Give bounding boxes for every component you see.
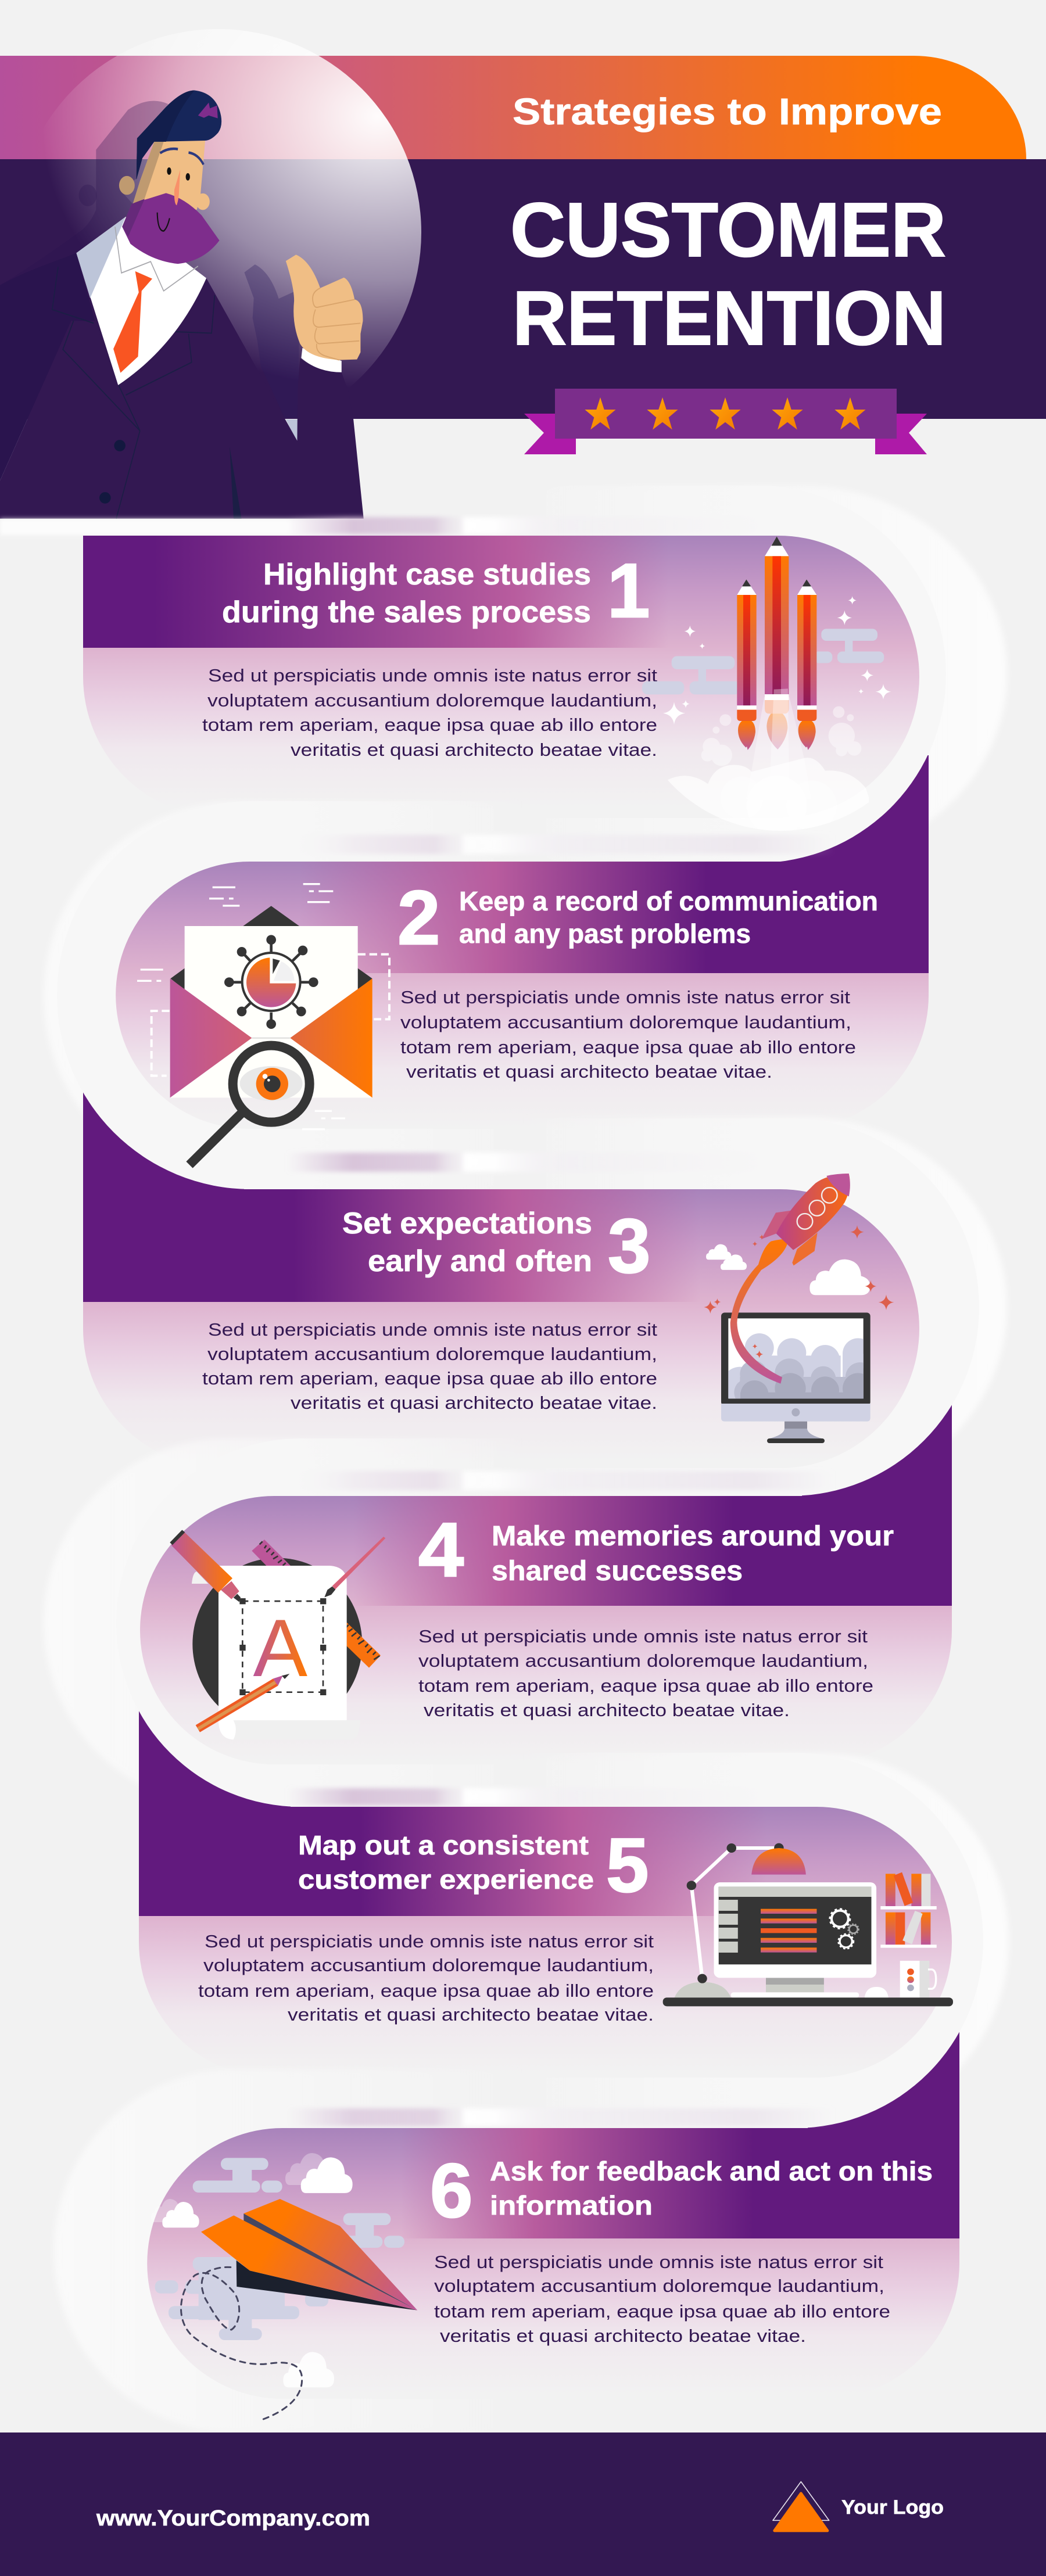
outer glow 4 [44, 1438, 523, 1807]
panel 6: feedback [54, 2069, 959, 2433]
dark title band [0, 159, 1046, 419]
number 2: 2 [397, 875, 440, 960]
heading 2: Keep a record of communication [459, 886, 878, 916]
footer [0, 2433, 1046, 2576]
body text 6: Sed ut perspiciatis unde omnis iste natus error sit [434, 2252, 883, 2272]
heading 5: customer experience [298, 1864, 594, 1895]
body text 1 [202, 665, 657, 760]
heading 1: Highlight case studies [263, 558, 591, 591]
body text 1: veritatis et quasi architecto beatae vitae. [291, 740, 657, 760]
header banner [0, 29, 1046, 519]
inner backing 3 [465, 1118, 979, 1496]
body text 4: Sed ut perspiciatis unde omnis iste natus error sit [418, 1626, 868, 1646]
subtitle: Strategies to Improve [513, 91, 942, 132]
body text 6 [434, 2252, 890, 2346]
right pencil [797, 579, 816, 750]
heading 4: Make memories around your [492, 1521, 894, 1552]
left pencil [737, 579, 757, 750]
body text 2: Sed ut perspiciatis unde omnis iste natus error sit [400, 987, 850, 1007]
junction streak 5 [287, 2108, 834, 2126]
icon: envelope and magnifier [137, 884, 389, 1165]
rocket trail [730, 1239, 789, 1384]
body text 3: voluptatem accusantium doloremque laudantium, [207, 1344, 657, 1364]
body text 4: veritatis et quasi architecto beatae vitae. [424, 1700, 790, 1720]
header band 2 [244, 862, 929, 973]
heading 1 [222, 558, 591, 629]
body text 2: voluptatem accusantium doloremque laudantium, [400, 1012, 851, 1032]
number 5: 5 [606, 1822, 649, 1908]
inner backing 4 [116, 1438, 523, 1807]
heading 6 [490, 2156, 933, 2220]
flight path [181, 2267, 302, 2419]
website: www.YourCompany.com [96, 2506, 370, 2531]
outer glow 1 [465, 486, 1007, 862]
panel 2: record of communication [44, 801, 929, 1191]
title line 1: CUSTOMER [510, 187, 946, 272]
heading 2 [459, 886, 878, 949]
body text 3: totam rem aperiam, eaque ipsa quae ab illo entore [202, 1368, 657, 1389]
icon: design tools and letter A [170, 1530, 385, 1739]
panel 4: shared successes [44, 1438, 952, 1808]
body text 1: voluptatem accusantium doloremque laudantium, [207, 690, 657, 711]
outer glow 3 [465, 1117, 1007, 1498]
marker [170, 1530, 241, 1602]
heading 5 [298, 1830, 594, 1895]
junction streak under header [0, 517, 834, 535]
heading 6: Ask for feedback and act on this [490, 2156, 933, 2186]
connector 5 to 6 [808, 2016, 959, 2129]
body text 6: voluptatem accusantium doloremque laudantium, [434, 2276, 884, 2296]
header band 4 [267, 1496, 952, 1606]
selection box [239, 1598, 326, 1695]
mug [900, 1961, 936, 1997]
heading 1: during the sales process [222, 595, 591, 629]
white clouds [706, 1244, 870, 1295]
outer glow 5 [465, 1753, 1009, 2129]
center pencil [765, 536, 789, 749]
junction streak 3 [287, 1471, 834, 1490]
bookshelf [880, 1872, 937, 1948]
body text 1: Sed ut perspiciatis unde omnis iste natus error sit [208, 665, 657, 686]
magnifier with eye [189, 1046, 310, 1165]
pill 5 [139, 1807, 952, 2078]
icon: pencil rockets [642, 536, 891, 835]
body text 4 [418, 1626, 873, 1720]
outer glow 6 [54, 2069, 523, 2433]
body text 4: totam rem aperiam, eaque ipsa quae ab illo entore [418, 1676, 873, 1696]
clouds [151, 2153, 353, 2387]
body text 5: voluptatem accusantium doloremque laudantium, [203, 1955, 654, 1975]
connector 2 to 3 [83, 1081, 244, 1191]
rocket [762, 1174, 850, 1265]
heading 3: Set expectations [342, 1207, 592, 1240]
star ribbon [524, 389, 927, 454]
body text 3: veritatis et quasi architecto beatae vitae. [291, 1393, 657, 1413]
body text 1: totam rem aperiam, eaque ipsa quae ab illo entore [202, 715, 657, 735]
exhaust smoke [667, 688, 869, 835]
brush [324, 1537, 385, 1597]
connector 1 to 2 [779, 755, 929, 863]
heading 6: information [490, 2190, 653, 2220]
connector 3 to 4 [802, 1383, 952, 1497]
junction streak 1 [287, 835, 834, 854]
body text 5: Sed ut perspiciatis unde omnis iste natus error sit [205, 1931, 654, 1951]
plane body [201, 2199, 417, 2310]
heading 2: and any past problems [459, 919, 751, 949]
letter A: A [253, 1602, 308, 1694]
body text 5 [198, 1931, 654, 2025]
number 1: 1 [607, 548, 650, 633]
pill 2 [116, 862, 929, 1129]
heading 5: Map out a consistent [298, 1830, 589, 1860]
number 6: 6 [430, 2148, 472, 2233]
heading 4: shared successes [492, 1556, 743, 1587]
number 3: 3 [608, 1203, 650, 1289]
pill 4 [140, 1496, 952, 1764]
body text 5: veritatis et quasi architecto beatae vitae. [288, 2004, 654, 2025]
spotlight circle [15, 29, 421, 436]
inner backing 5 [465, 1753, 983, 2128]
header band 5 [139, 1807, 872, 1916]
panel 1: case studies [83, 486, 1007, 863]
icon: rocket from monitor [704, 1174, 894, 1443]
top orange band [0, 56, 1026, 159]
header band 3 [83, 1189, 837, 1302]
pill 3 [83, 1189, 919, 1468]
title line 2: RETENTION [513, 275, 946, 361]
heading 3 [342, 1207, 592, 1278]
computer [714, 1882, 889, 1998]
lamp [675, 1843, 806, 1997]
pill 1 [83, 536, 919, 818]
monitor [721, 1312, 875, 1443]
connector 4 to 5 [139, 1702, 291, 1808]
businessman with thumbs up [0, 91, 364, 519]
body text 5: totam rem aperiam, eaque ipsa quae ab illo entore [198, 1981, 654, 2001]
panel 3: set expectations [83, 1117, 1007, 1498]
inner backing 2 [57, 801, 523, 1189]
header band 1 [83, 536, 837, 648]
header band 6 [279, 2128, 959, 2238]
junction streak 4 [287, 1788, 834, 1806]
body text 2: veritatis et quasi architecto beatae vitae. [406, 1061, 772, 1082]
body text 3: Sed ut perspiciatis unde omnis iste natus error sit [208, 1319, 657, 1340]
logo mark [773, 2482, 829, 2531]
panel 5: customer experience [139, 1753, 1009, 2129]
icon: desk with monitor [663, 1843, 953, 2006]
heading 4 [492, 1521, 894, 1587]
heading 3: early and often [368, 1244, 592, 1278]
body text 6: veritatis et quasi architecto beatae vitae. [440, 2326, 806, 2346]
body text 2: totam rem aperiam, eaque ipsa quae ab illo entore [400, 1037, 856, 1057]
pencil [196, 1674, 289, 1732]
gear pie chart [224, 935, 318, 1029]
body text 4: voluptatem accusantium doloremque laudantium, [418, 1651, 868, 1671]
body text 3 [202, 1319, 657, 1413]
pill 6 [147, 2128, 959, 2399]
outer glow 2 [44, 801, 523, 1190]
icon: paper plane [151, 2153, 417, 2419]
body text 6: totam rem aperiam, eaque ipsa quae ab illo entore [434, 2301, 890, 2322]
logo text: Your Logo [841, 2496, 944, 2518]
inner backing 1 [465, 486, 946, 863]
junction streak 2 [287, 1153, 834, 1172]
number 4: 4 [418, 1507, 464, 1592]
body text 2 [400, 987, 856, 1082]
